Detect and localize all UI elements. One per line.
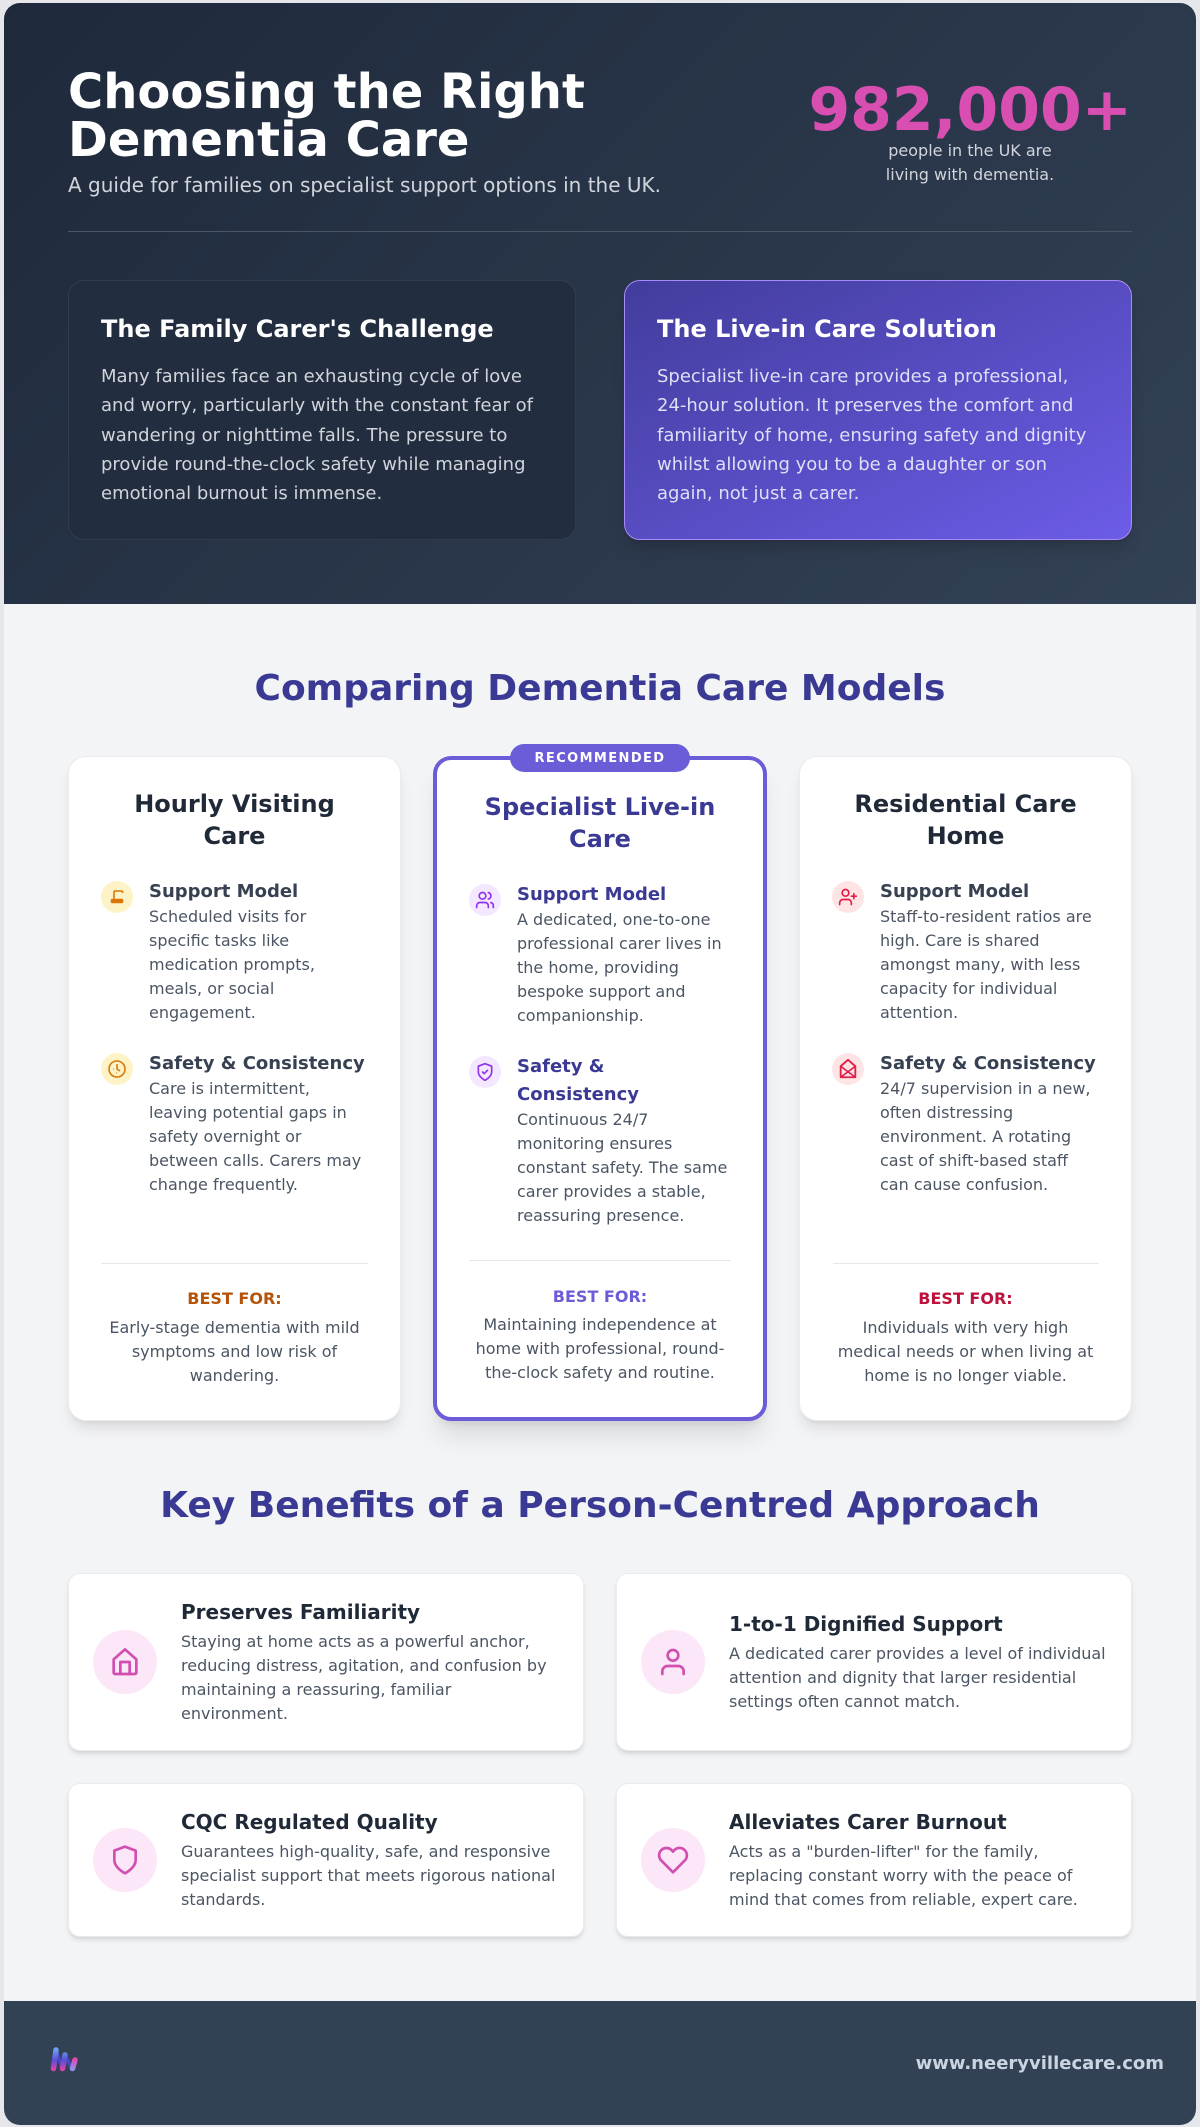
card title: Specialist Live-in: [485, 793, 715, 821]
item heading: [517, 1056, 639, 1105]
panel text: provide round-the-clock safety while managing: [101, 454, 526, 475]
icon: walker: [101, 881, 133, 913]
icon: house: [93, 1630, 157, 1694]
item text: specific tasks like: [149, 931, 289, 950]
item text: carer provides a stable,: [517, 1182, 706, 1201]
benefit heading: Alleviates Carer Burnout: [729, 1810, 1007, 1834]
item text: Scheduled visits for: [149, 907, 306, 926]
panel text: whilst allowing you to be a daughter or son: [657, 454, 1047, 475]
item text: between calls. Carers may: [149, 1151, 361, 1170]
icon: heart: [641, 1828, 705, 1892]
item heading: Support Model: [149, 881, 298, 902]
benefit heading: CQC Regulated Quality: [181, 1810, 438, 1834]
item text: amongst many, with less: [880, 955, 1080, 974]
support model: [517, 884, 722, 1025]
item text: leaving potential gaps in: [149, 1103, 347, 1122]
card: hourly visiting care: [68, 756, 401, 1421]
item heading: Safety & Consistency: [880, 1053, 1096, 1074]
benefit text: standards.: [181, 1890, 265, 1909]
subtitle: A guide for families on specialist support options in the UK.: [68, 173, 661, 197]
item text: cast of shift-based staff: [880, 1151, 1068, 1170]
best-for text: wandering.: [190, 1366, 279, 1385]
benefit: 1-to-1 dignified support: [616, 1573, 1132, 1751]
panel: the live-in care solution: [624, 280, 1132, 540]
item text: change frequently.: [149, 1175, 298, 1194]
card title: Care: [204, 822, 265, 850]
item text: Staff-to-resident ratios are: [880, 907, 1092, 926]
item heading: Safety & Consistency: [149, 1053, 365, 1074]
header band: [4, 3, 1196, 604]
benefit text: replacing constant worry with the peace of: [729, 1866, 1072, 1885]
benefit text: [181, 1632, 547, 1723]
icon: person: [641, 1630, 705, 1694]
item text: monitoring ensures: [517, 1134, 672, 1153]
icon: home with cross: [832, 1053, 864, 1085]
panel text: Many families face an exhausting cycle of love: [101, 366, 522, 387]
card title: Residential Care: [854, 790, 1077, 818]
panel text: [101, 366, 534, 504]
item heading: Support Model: [880, 881, 1029, 902]
best-for text: Individuals with very high: [863, 1318, 1068, 1337]
benefit text: Guarantees high-quality, safe, and responsive: [181, 1842, 550, 1861]
item text: [517, 910, 722, 1025]
item heading: Consistency: [517, 1084, 639, 1105]
best-for text: [109, 1318, 360, 1385]
title: [68, 64, 585, 168]
item text: [149, 1079, 361, 1194]
best for: [838, 1289, 1093, 1385]
item text: often distressing: [880, 1103, 1013, 1122]
best-for text: [838, 1318, 1093, 1385]
card: specialist live-in care (recommended): [433, 756, 767, 1421]
panel text: wandering or nighttime falls. The pressure to: [101, 424, 507, 446]
item text: bespoke support and: [517, 982, 686, 1001]
card: residential care home: [799, 756, 1132, 1421]
item text: reassuring presence.: [517, 1206, 684, 1225]
icon: clock: [101, 1053, 133, 1085]
benefit heading: 1-to-1 Dignified Support: [729, 1612, 1003, 1636]
benefit text: mind that comes from reliable, expert care.: [729, 1890, 1078, 1909]
best-for text: Early-stage dementia with mild: [109, 1318, 360, 1337]
benefit: alleviates carer burnout: [616, 1783, 1132, 1937]
item text: constant safety. The same: [517, 1158, 727, 1177]
title: Choosing the Right: [68, 64, 585, 120]
item text: [880, 907, 1092, 1022]
item text: meals, or social: [149, 979, 274, 998]
safety and consistency: [149, 1053, 365, 1194]
panel text: [657, 366, 1086, 504]
support model: [149, 881, 315, 1022]
panel heading: The Family Carer's Challenge: [101, 315, 494, 343]
section heading: comparing models: Comparing Dementia Care Models: [255, 668, 945, 709]
best-for text: the-clock safety and routine.: [485, 1363, 715, 1382]
benefit: preserves familiarity: [68, 1573, 584, 1751]
item text: companionship.: [517, 1006, 644, 1025]
stat caption: people in the UK are: [888, 141, 1052, 160]
benefit text: specialist support that meets rigorous national: [181, 1866, 555, 1885]
website: www.neeryvillecare.com: [916, 2053, 1164, 2074]
panel text: familiarity of home, ensuring safety and dignity: [657, 424, 1086, 446]
benefit text: [181, 1842, 555, 1909]
stat caption: [886, 141, 1054, 184]
recommended badge: [510, 744, 690, 772]
benefit text: reducing distress, agitation, and confusion by: [181, 1656, 547, 1675]
item heading: Support Model: [517, 884, 666, 905]
benefit text: environment.: [181, 1704, 288, 1723]
benefit text: A dedicated carer provides a level of individual: [729, 1644, 1106, 1663]
icon: shield check: [469, 1056, 501, 1088]
card title: Care: [569, 825, 631, 853]
safety and consistency: [517, 1056, 727, 1225]
icon: shield: [93, 1828, 157, 1892]
panel text: and worry, particularly with the constant fear of: [101, 395, 533, 416]
panel: the family carer's challenge: [68, 280, 576, 540]
benefit text: Staying at home acts as a powerful anchor,: [181, 1632, 530, 1651]
benefit text: [729, 1644, 1106, 1711]
best-for label: BEST FOR:: [553, 1287, 647, 1306]
item heading: Safety &: [517, 1056, 604, 1077]
card title: Hourly Visiting: [134, 790, 335, 818]
item text: [149, 907, 315, 1022]
footer: [4, 2001, 1196, 2125]
item text: A dedicated, one-to-one: [517, 910, 710, 929]
icon: users: [469, 884, 501, 916]
card title: [134, 790, 335, 850]
title: Dementia Care: [68, 112, 469, 168]
support model: [880, 881, 1092, 1022]
best for: [109, 1289, 360, 1385]
safety and consistency: [880, 1053, 1096, 1194]
card title: Home: [927, 822, 1004, 850]
panel text: again, not just a carer.: [657, 483, 859, 504]
item text: [517, 1110, 727, 1225]
benefit heading: Preserves Familiarity: [181, 1600, 420, 1624]
item text: Continuous 24/7: [517, 1110, 648, 1129]
best-for text: medical needs or when living at: [838, 1342, 1093, 1361]
item text: engagement.: [149, 1003, 256, 1022]
benefit text: Acts as a "burden-lifter" for the family,: [729, 1842, 1038, 1861]
best-for text: Maintaining independence at: [483, 1315, 717, 1334]
best-for label: BEST FOR:: [187, 1289, 282, 1308]
benefit text: attention and dignity that larger residential: [729, 1668, 1076, 1687]
panel text: emotional burnout is immense.: [101, 483, 382, 504]
card title: [485, 793, 715, 853]
item text: professional carer lives in: [517, 934, 722, 953]
item text: capacity for individual: [880, 979, 1057, 998]
panel text: Specialist live-in care provides a professional,: [657, 366, 1068, 387]
item text: attention.: [880, 1003, 958, 1022]
item text: [880, 1079, 1090, 1194]
best-for text: home is no longer viable.: [864, 1366, 1067, 1385]
recommended badge: RECOMMENDED: [534, 751, 665, 766]
best for: [476, 1287, 724, 1382]
item text: Care is intermittent,: [149, 1079, 310, 1098]
benefit text: [729, 1842, 1078, 1909]
best-for text: symptoms and low risk of: [132, 1342, 337, 1361]
panel heading: The Live-in Care Solution: [657, 315, 997, 343]
item text: high. Care is shared: [880, 931, 1040, 950]
best-for text: home with professional, round-: [476, 1339, 724, 1358]
stat number: 982,000+: [808, 75, 1132, 145]
icon: user plus: [832, 881, 864, 913]
item text: safety overnight or: [149, 1127, 301, 1146]
item text: medication prompts,: [149, 955, 315, 974]
statistic: [808, 75, 1132, 184]
item text: 24/7 supervision in a new,: [880, 1079, 1090, 1098]
best-for label: BEST FOR:: [918, 1289, 1013, 1308]
item text: the home, providing: [517, 958, 679, 977]
panel text: 24-hour solution. It preserves the comfort and: [657, 395, 1073, 416]
benefit: cqc regulated quality: [68, 1783, 584, 1937]
logo: [50, 2047, 78, 2072]
benefit text: maintaining a reassuring, familiar: [181, 1680, 451, 1699]
item text: environment. A rotating: [880, 1127, 1071, 1146]
best-for text: [476, 1315, 724, 1382]
stat caption: living with dementia.: [886, 165, 1054, 184]
card title: [854, 790, 1077, 850]
item text: can cause confusion.: [880, 1175, 1048, 1194]
benefit text: settings often cannot match.: [729, 1692, 960, 1711]
section heading: key benefits: Key Benefits of a Person-Centred Approach: [160, 1485, 1040, 1526]
